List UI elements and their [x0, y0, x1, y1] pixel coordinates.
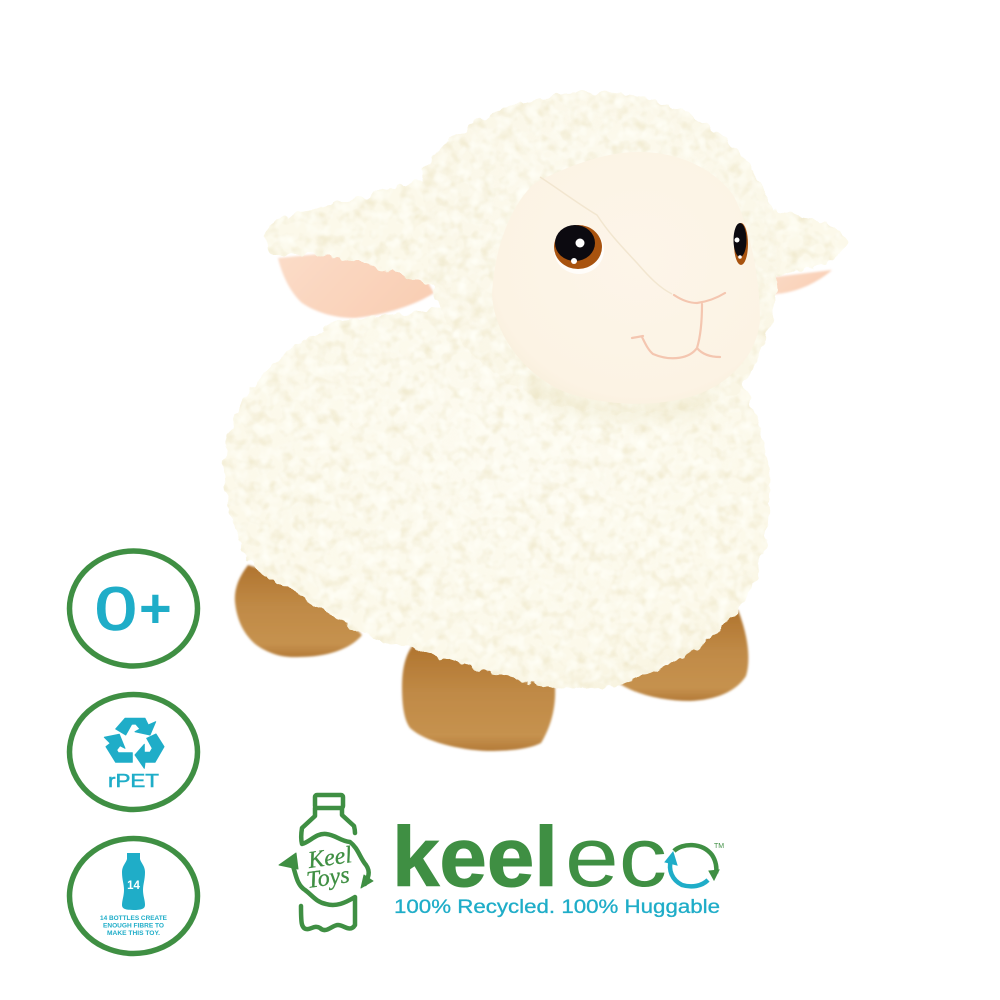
icon: recycling arrows: [104, 718, 164, 768]
badge ring: [70, 694, 198, 810]
right ear pink lining: [766, 270, 832, 294]
right eye: [734, 223, 748, 265]
nose and smile stitching: [632, 293, 725, 358]
Keel Toys mark: Keel: [305, 842, 354, 874]
head wool: [422, 92, 778, 412]
bottles caption: [100, 916, 167, 937]
shadow under face: [530, 370, 720, 420]
ec wordmark: ec: [565, 810, 667, 904]
body wool: [224, 300, 769, 690]
face: [492, 152, 760, 404]
left eye: [554, 225, 604, 274]
bottle count: 14: [127, 880, 140, 892]
face seam: [540, 177, 672, 294]
bottles caption: MAKE THIS TOY.: [107, 931, 160, 937]
icon: bottle: [122, 853, 145, 910]
badge ring: [70, 551, 198, 666]
plush sheep toy: [224, 92, 847, 751]
back right foot: [617, 610, 748, 701]
arrow head right: [361, 875, 373, 888]
left ear pink lining: [278, 252, 434, 318]
badge: age 0+: [70, 551, 198, 666]
bottles caption: 14 BOTTLES CREATE: [100, 916, 167, 922]
badge ring: [70, 838, 198, 954]
keeleco logo: [279, 795, 724, 930]
age label: +: [139, 576, 172, 640]
age label: [95, 576, 172, 643]
trademark: TM: [714, 843, 724, 850]
o formed by recycling arrows: [665, 845, 719, 886]
keel wordmark: keel: [392, 810, 558, 904]
badge: 14 bottles: [70, 838, 198, 954]
back left foot: [235, 565, 362, 657]
left ear wool: [264, 182, 440, 284]
Keel Toys mark: [305, 842, 354, 894]
rPET label: rPET: [108, 771, 159, 791]
tagline: 100% Recycled. 100% Huggable: [394, 897, 720, 918]
icon: recycled bottle: [279, 795, 373, 930]
age label: 0: [95, 576, 137, 643]
Keel Toys mark: Toys: [305, 862, 351, 894]
bottles caption: ENOUGH FIBRE TO: [103, 924, 164, 930]
front foot: [402, 645, 555, 751]
arrow head left: [279, 853, 298, 869]
badge: rPET recycled: [70, 694, 198, 810]
right ear wool: [768, 210, 847, 278]
